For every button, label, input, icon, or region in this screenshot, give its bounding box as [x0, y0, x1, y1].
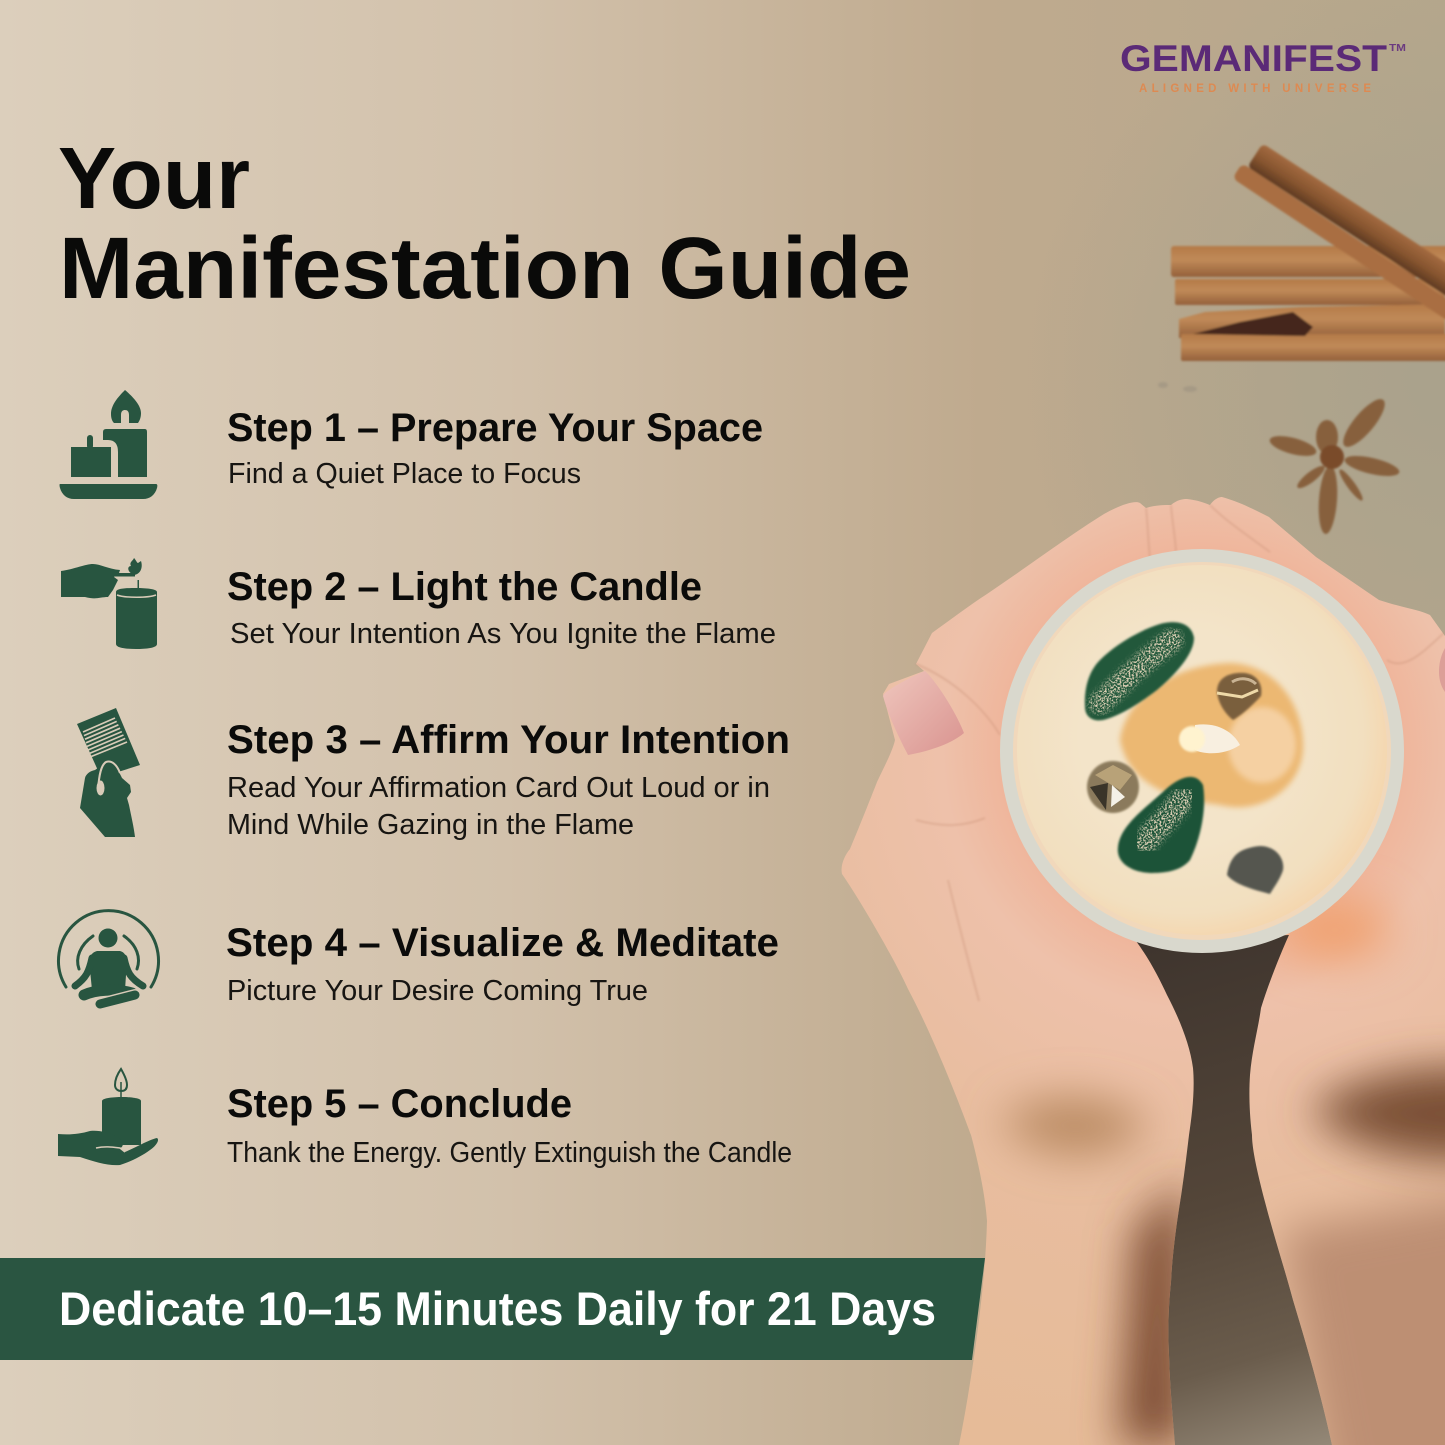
image: star anise [1268, 394, 1401, 535]
banner: Dedicate 10–15 Minutes Daily for 21 Days [59, 1282, 936, 1335]
candle rim [1000, 549, 1404, 953]
description: Thank the Energy. Gently Extinguish the Candle [227, 1137, 792, 1169]
dark rough stone [1227, 846, 1283, 894]
icon: hand lighting a candle [61, 558, 157, 649]
moss agate stone [1085, 622, 1194, 720]
image: fingernail [883, 671, 964, 755]
image: candle from above [1000, 549, 1404, 953]
description: Find a Quiet Place to Focus [228, 458, 581, 490]
heading: Step 4 – Visualize & Meditate [226, 921, 779, 965]
icon: candle on open hand [58, 1069, 158, 1165]
image: right fingernail [1439, 648, 1445, 692]
description: Set Your Intention As You Ignite the Flame [230, 618, 776, 650]
moss agate stone [1118, 777, 1204, 873]
title: Manifestation Guide [59, 220, 911, 317]
heading: Step 2 – Light the Candle [227, 565, 702, 609]
image: hand creases [916, 505, 1445, 1001]
candle wax [1017, 565, 1387, 935]
logo: Gemanifest: ALIGNED WITH UNIVERSE [1139, 83, 1371, 95]
right wrist shadow [1310, 1067, 1445, 1161]
image: table smudges [1158, 382, 1197, 392]
icon: meditating figure [59, 911, 159, 1004]
logo: Gemanifest [1120, 38, 1406, 95]
logo: Gemanifest: GEMANIFEST [1120, 38, 1387, 79]
image: cinnamon sticks [1171, 143, 1445, 361]
icon: hand holding affirmation card [77, 708, 140, 837]
title: Your [58, 130, 250, 227]
image: hands [830, 480, 1445, 1445]
banner [0, 1258, 985, 1360]
flame reflection [1179, 724, 1240, 753]
stone speckles [1100, 640, 1172, 703]
description: Read Your Affirmation Card Out Loud or in [227, 772, 770, 804]
logo: Gemanifest: TM [1389, 43, 1406, 54]
right forearm tone [1280, 1190, 1445, 1445]
icon: candles on a tray [60, 390, 157, 499]
stone glow [1228, 707, 1296, 783]
heading: Step 1 – Prepare Your Space [227, 406, 763, 450]
left wrist shadow [1000, 1098, 1150, 1154]
step 1 [60, 390, 763, 499]
inner rim ring [1013, 562, 1391, 940]
description: Mind While Gazing in the Flame [227, 809, 634, 841]
title [58, 130, 911, 317]
glow under candle [1280, 900, 1390, 960]
step 3 [77, 708, 790, 841]
description [227, 772, 770, 841]
pyrite stone [1087, 761, 1139, 813]
heading: Step 5 – Conclude [227, 1082, 572, 1126]
candle highlight [117, 595, 156, 597]
left forearm edge shadow [1120, 1180, 1185, 1445]
melted wax pool [1120, 663, 1303, 807]
stone speckles [1145, 798, 1184, 842]
image: shadow between the hands [1130, 930, 1340, 1445]
step 5 [58, 1069, 792, 1169]
small tiger eye stone [1217, 673, 1261, 720]
step 4 [59, 911, 779, 1007]
step 2 [61, 558, 776, 650]
description: Picture Your Desire Coming True [227, 975, 648, 1007]
heading: Step 3 – Affirm Your Intention [227, 718, 790, 762]
